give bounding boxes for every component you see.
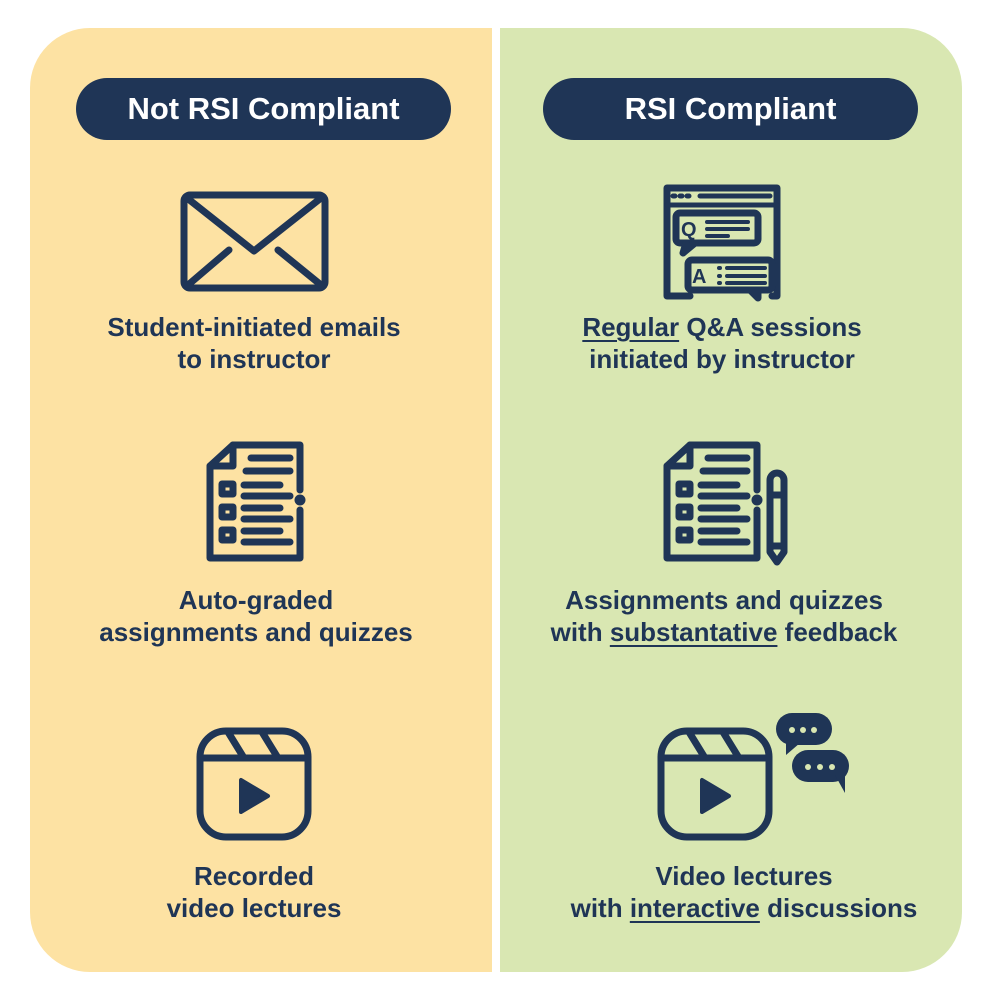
heading: compliant <box>543 78 918 140</box>
icon: envelope <box>184 195 325 288</box>
icon: video right <box>661 731 769 837</box>
panel: compliant <box>500 28 962 972</box>
icon: Q&A window <box>667 188 777 298</box>
panel: not compliant <box>30 28 492 972</box>
text: auto-graded: assignments and quizzes <box>99 617 413 647</box>
icon: video left <box>200 731 308 837</box>
text: interactive: with interactive discussions <box>571 893 917 923</box>
text: recorded: video lectures <box>167 893 341 923</box>
text: interactive: Video lectures <box>655 861 833 891</box>
text: auto-graded <box>99 585 413 647</box>
text: emails <box>107 312 401 374</box>
text: QA: initiated by instructor <box>589 344 855 374</box>
text: auto-graded: Auto-graded <box>179 585 333 615</box>
text: QA: Regular Q&A sessions <box>582 312 862 342</box>
heading: not compliant: Not RSI Compliant <box>127 91 400 126</box>
text: feedback: Assignments and quizzes <box>565 585 883 615</box>
icon: Q&A window: Q <box>681 219 697 241</box>
text: recorded: Recorded <box>194 861 314 891</box>
heading: compliant: RSI Compliant <box>625 91 836 126</box>
text: feedback: with substantative feedback <box>551 617 897 647</box>
text: QA <box>582 312 862 374</box>
text: emails: to instructor <box>177 344 331 374</box>
icon: document left <box>210 445 302 558</box>
icon: Q&A window: A <box>692 266 706 288</box>
text: feedback <box>550 585 898 647</box>
text: recorded <box>166 861 341 923</box>
heading: not compliant <box>76 78 451 140</box>
text: interactive <box>570 861 917 923</box>
icon: chat bubbles <box>776 713 849 793</box>
text: emails: Student-initiated emails <box>107 312 401 342</box>
icon: document with pencil <box>667 445 784 562</box>
